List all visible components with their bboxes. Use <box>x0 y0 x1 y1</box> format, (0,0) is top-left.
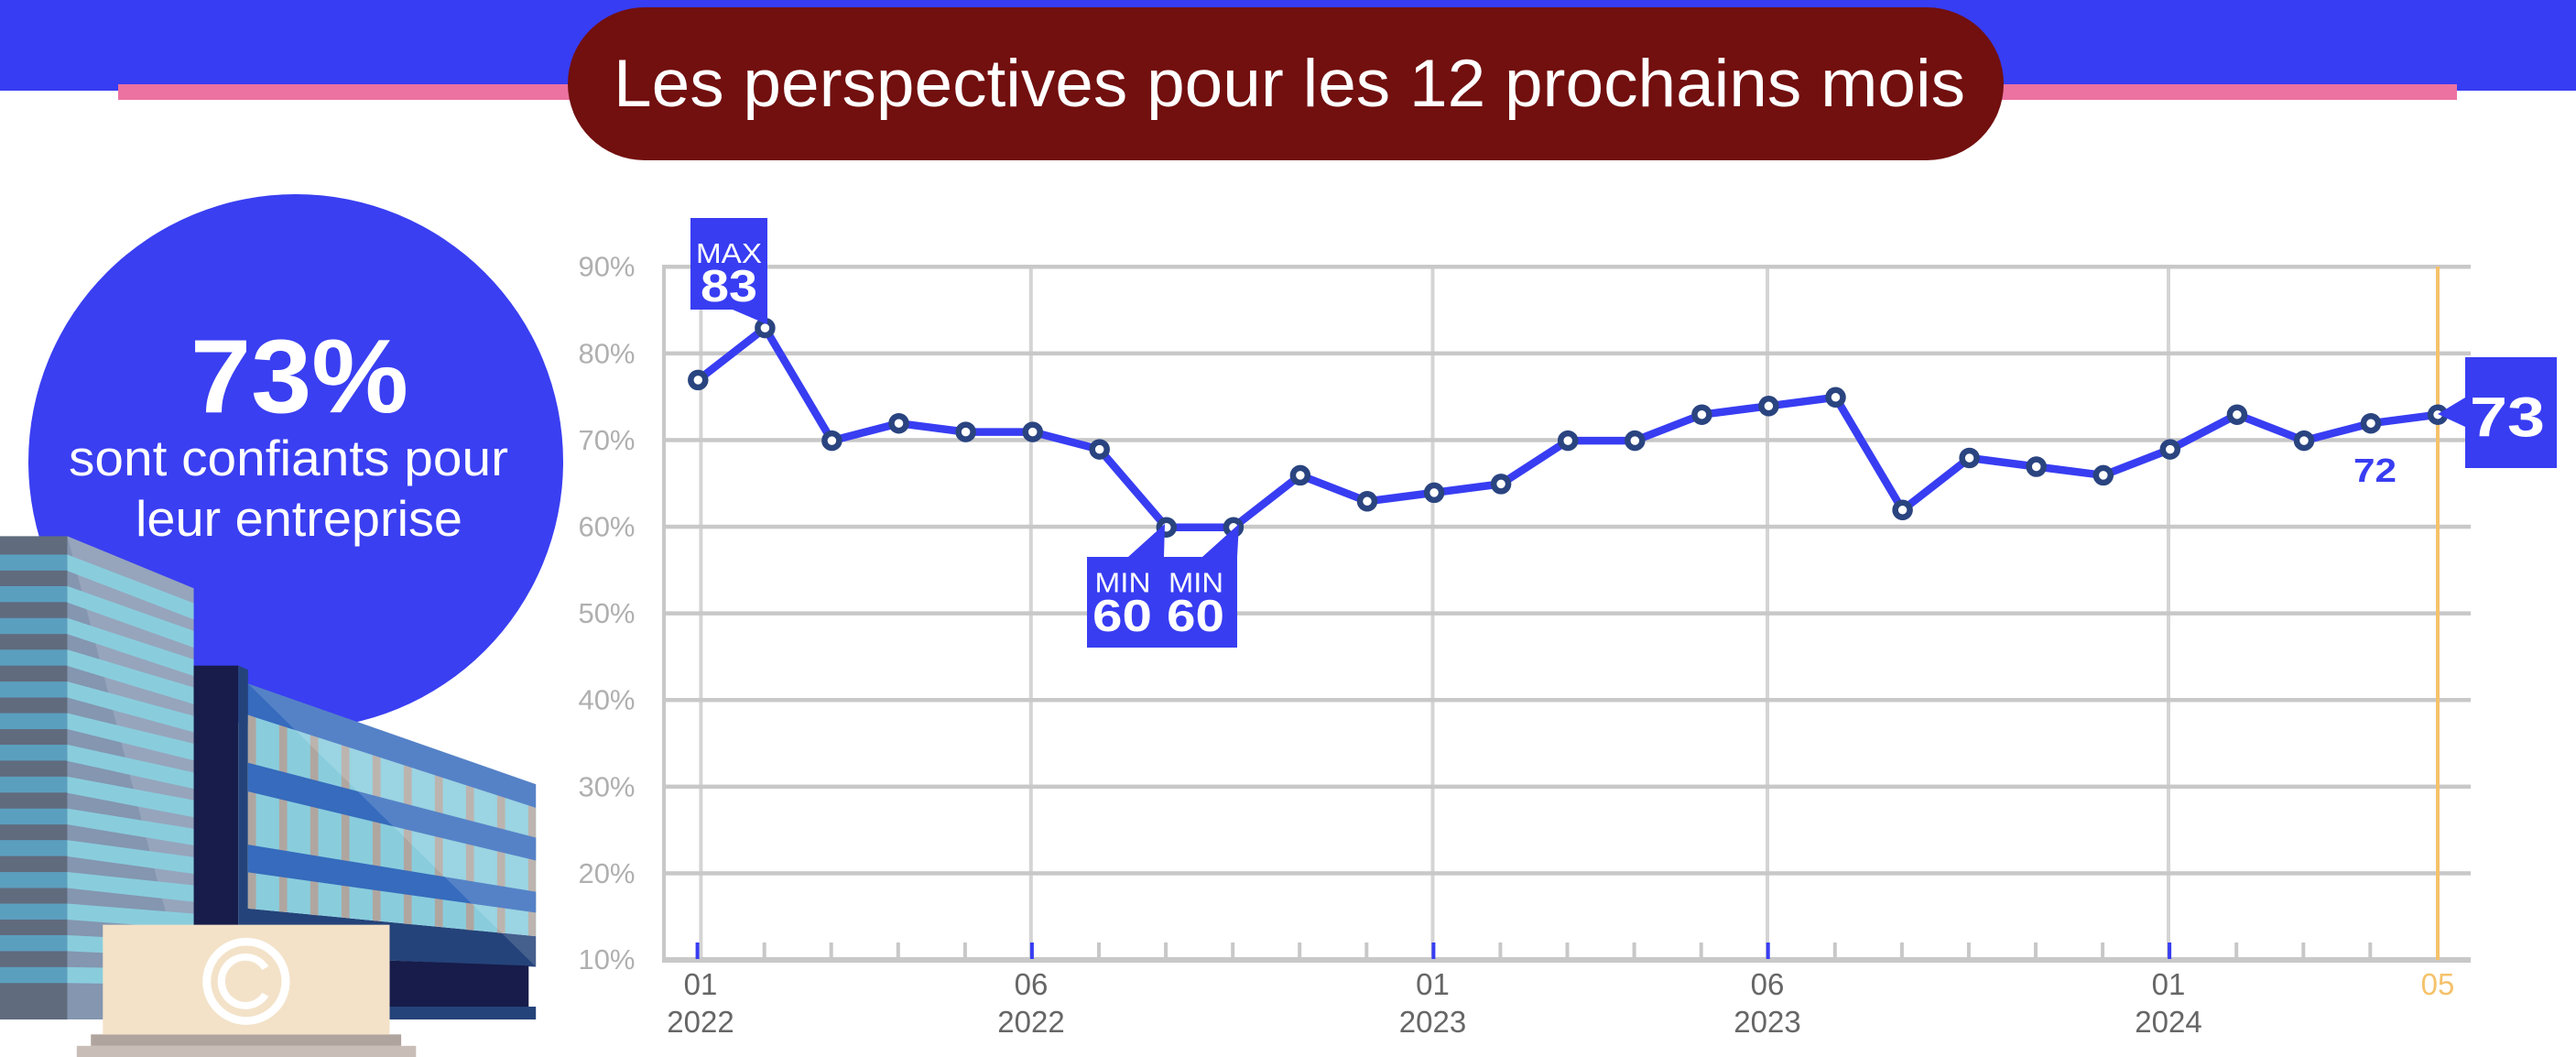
callout: current value 73: 73 <box>2470 387 2545 449</box>
x axis ticks <box>696 943 2372 959</box>
data line <box>698 328 2438 528</box>
callout: minimum 60 right <box>1163 524 1239 648</box>
callout: minimum 60 right: MIN <box>1168 567 1223 599</box>
x axis labels: 01 <box>1416 967 1450 1001</box>
callout: minimum 60 left <box>1087 524 1165 648</box>
icon: office building <box>0 536 536 1057</box>
x axis labels: 06 <box>1751 967 1784 1001</box>
x axis labels: 2023 <box>1734 1005 1801 1039</box>
y axis labels: 70% <box>578 424 636 456</box>
y axis labels: 90% <box>578 251 636 283</box>
y axis labels: 40% <box>578 684 636 716</box>
callout: minimum 60 left: MIN <box>1095 567 1150 599</box>
current month marker line <box>2436 267 2440 960</box>
stat circle: leur entreprise <box>136 490 462 547</box>
x axis labels: 01 <box>2152 967 2185 1001</box>
x axis labels: 2023 <box>1399 1005 1466 1039</box>
callout: maximum 83: 83 <box>701 262 757 311</box>
entrance plinth <box>77 925 416 1057</box>
x axis labels: 2022 <box>997 1005 1065 1039</box>
icon: copyright logo <box>207 942 286 1021</box>
x axis labels <box>667 967 2454 1039</box>
glass wing <box>248 683 536 966</box>
title pill: Les perspectives pour les 12 prochains mois <box>614 47 1965 121</box>
stat circle <box>28 194 563 729</box>
x axis labels: 2024 <box>2135 1005 2202 1039</box>
data markers <box>690 321 2445 535</box>
y axis labels <box>578 251 636 975</box>
tower front face <box>0 536 68 1019</box>
header banner <box>0 0 2576 100</box>
x axis labels: 2022 <box>667 1005 734 1039</box>
dark central tower <box>194 666 536 1019</box>
title pill <box>568 7 2004 160</box>
callout: minimum 60 left: 60 <box>1092 592 1152 641</box>
y axis labels: 80% <box>578 337 636 369</box>
x axis labels: 06 <box>1015 967 1048 1001</box>
stat circle: 73% <box>190 319 408 435</box>
stat circle: sont confiants pour <box>69 430 508 486</box>
callout: maximum 83: MAX <box>696 237 762 269</box>
line chart <box>578 218 2557 1039</box>
y axis labels: 30% <box>578 770 636 802</box>
tower side face <box>68 536 194 1019</box>
callout: maximum 83 <box>690 218 767 324</box>
y axis labels: 60% <box>578 511 636 542</box>
x axis labels: 05 <box>2421 967 2454 1001</box>
y axis labels: 10% <box>578 943 636 975</box>
data label 72: 72 <box>2353 452 2397 489</box>
chart grid <box>662 265 2471 963</box>
y axis labels: 50% <box>578 597 636 629</box>
y axis labels: 20% <box>578 857 636 889</box>
callout: minimum 60 right: 60 <box>1167 592 1224 641</box>
callout: current value 73 <box>2438 357 2557 468</box>
x axis labels: 01 <box>684 967 717 1001</box>
